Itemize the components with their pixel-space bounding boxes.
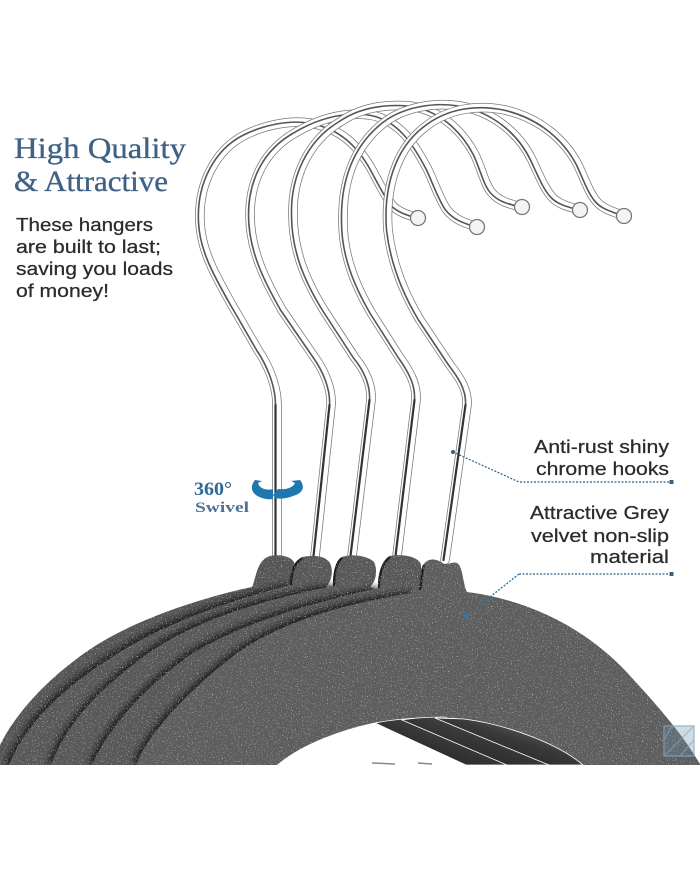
swivel label: [194, 479, 249, 516]
bottom residue marks: [372, 763, 432, 764]
hanger 1: [0, 555, 294, 765]
icon: swivel arrows: [252, 480, 303, 499]
description text: saving you loads: [16, 258, 173, 279]
hook 3: [291, 106, 530, 556]
callout: velvet material: velvet non-slip: [531, 525, 669, 546]
swivel label: Swivel: [195, 500, 249, 516]
title: [14, 132, 186, 198]
title: High Quality: [14, 132, 186, 165]
callout: chrome hooks: chrome hooks: [536, 458, 669, 479]
hook 5: [386, 108, 632, 560]
description text: of money!: [16, 280, 109, 301]
inner stripes: [375, 717, 583, 765]
opening background: [277, 718, 465, 765]
hook 2: [248, 114, 484, 556]
hanger 4: [92, 555, 422, 765]
callout: velvet material: Attractive Grey: [530, 502, 670, 523]
hanger opening: [277, 717, 583, 765]
watermark: [664, 726, 694, 756]
velvet hangers: [0, 555, 700, 765]
title: & Attractive: [14, 165, 168, 198]
front hanger: [136, 560, 700, 765]
hanger 3: [51, 555, 376, 765]
knob gap shading: [291, 557, 424, 590]
hook 1: [198, 122, 426, 556]
callout: chrome hooks: Anti-rust shiny: [534, 436, 670, 457]
description text: are built to last;: [16, 236, 161, 257]
description text: [16, 214, 173, 301]
hanger 2: [9, 556, 332, 765]
callout: chrome hooks: [451, 436, 674, 484]
hooks illustration: [198, 105, 632, 560]
swivel label: 360°: [194, 479, 232, 500]
infographic: [0, 100, 700, 765]
callout: velvet material: [464, 502, 674, 618]
callout: velvet material: material: [590, 546, 669, 567]
hook 4: [341, 105, 588, 556]
description text: These hangers: [16, 214, 153, 235]
